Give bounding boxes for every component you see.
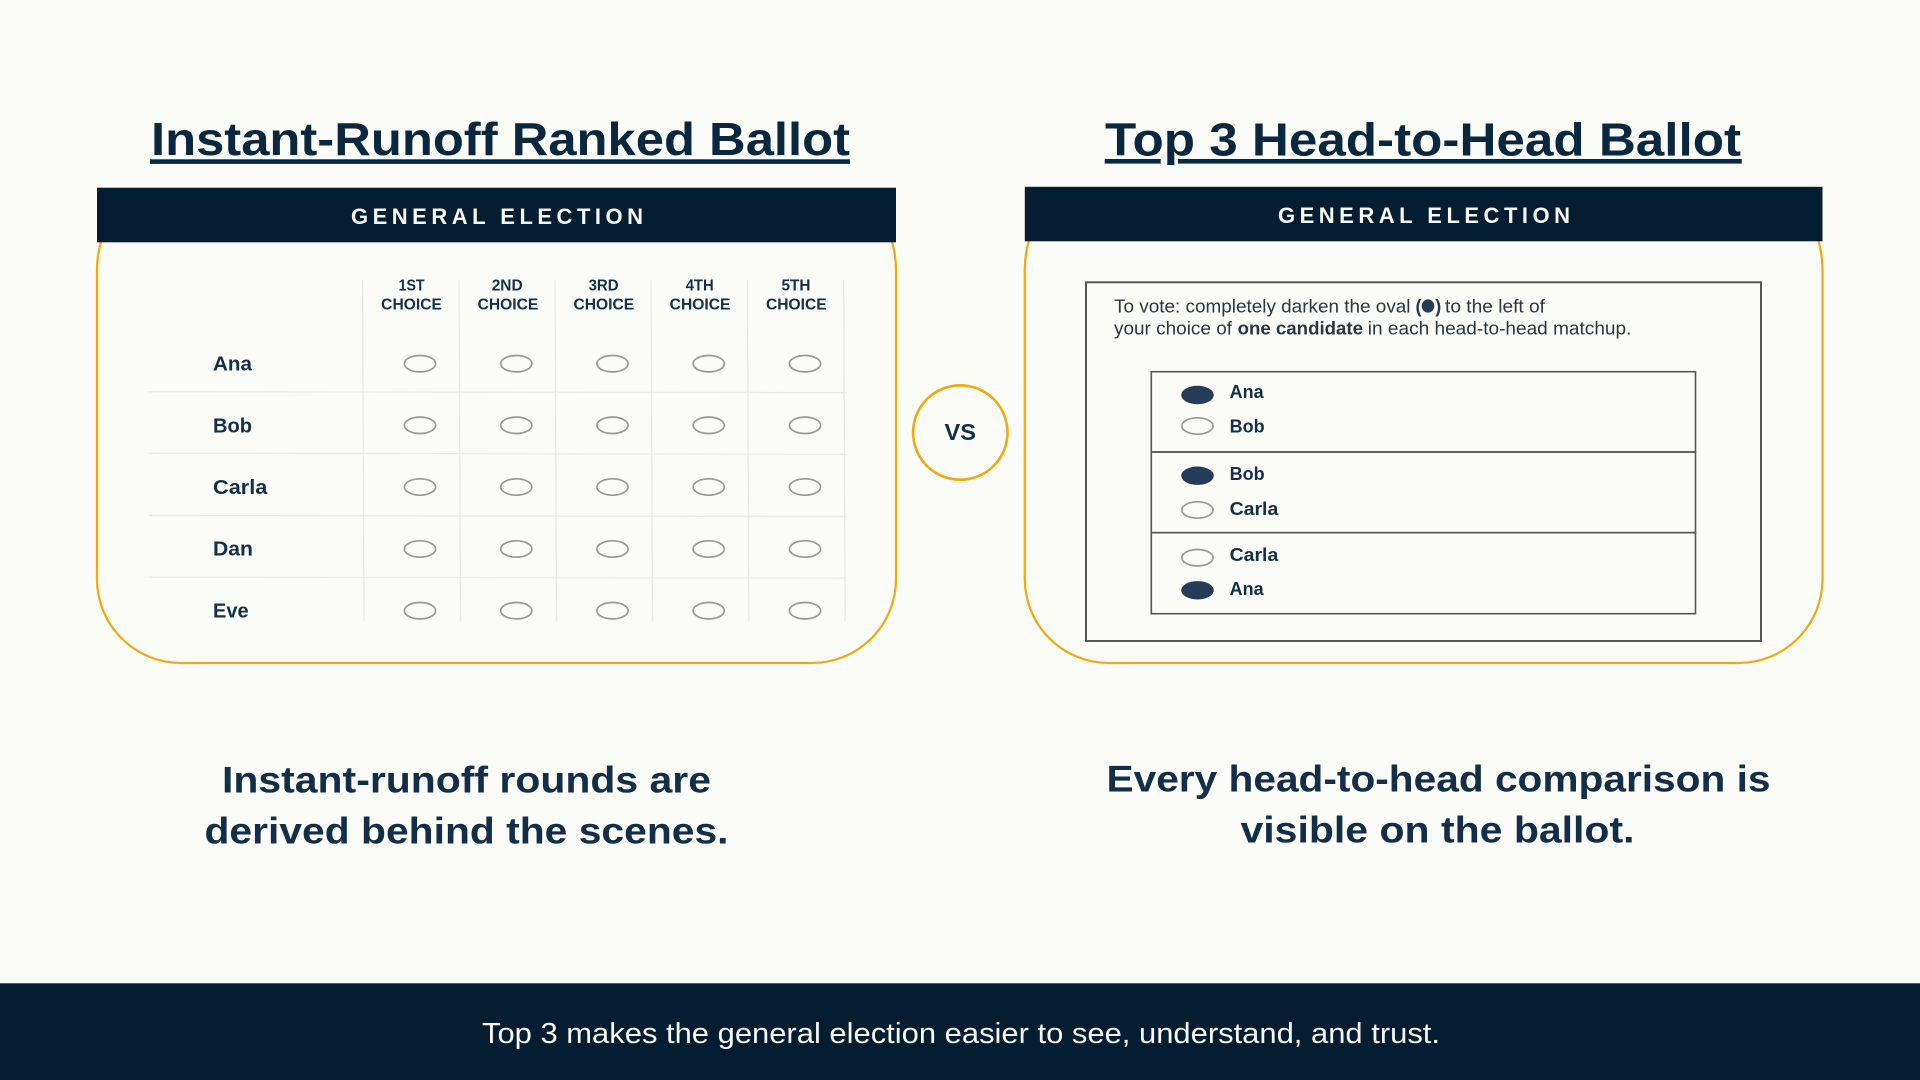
caption: head-to-head: [1106, 759, 1770, 850]
matchup box: Bob vs Carla: [1151, 452, 1696, 533]
heading: Top 3 Head-to-Head Ballot: Top 3 Head-to-Head Ballot: [1105, 114, 1741, 166]
panel outline: [1025, 241, 1822, 663]
panel outline: [97, 242, 896, 663]
caption: head-to-head: Every head-to-head comparison is: [1106, 759, 1770, 800]
row: Bob: [213, 415, 821, 437]
panel: head-to-head ballot: [1025, 187, 1822, 663]
matchup box: Bob vs Carla: Carla: [1230, 499, 1279, 519]
column headers: choices: 2ND: [492, 278, 523, 295]
matchup box: Ana vs Bob: Bob: [1230, 416, 1265, 436]
VS badge: VS: [944, 419, 976, 445]
caption: instant-runoff: derived behind the scenes.: [204, 810, 728, 851]
matchup box: Ana vs Bob: [1151, 372, 1696, 452]
row: Carla: [213, 477, 821, 499]
column headers: choices: CHOICE: [478, 296, 538, 313]
column headers: choices: CHOICE: [574, 296, 634, 313]
row: Eve: [213, 601, 821, 623]
row: Ana: [213, 354, 821, 376]
matchup box: Carla vs Ana: [1151, 533, 1696, 614]
panel: instant-runoff ballot: [97, 188, 896, 663]
column headers: choices: 3RD: [589, 278, 619, 295]
header bar: general election: GENERAL ELECTION: [1278, 203, 1570, 228]
column headers: choices: CHOICE: [670, 296, 730, 313]
voting instructions: your choice of: [1114, 318, 1233, 338]
caption: head-to-head: visible on the ballot.: [1240, 809, 1634, 850]
row: Ana: Ana: [213, 354, 253, 376]
row: Carla: Carla: [213, 477, 268, 499]
voting instructions: To vote: completely darken the oval: [1114, 296, 1410, 316]
voting instructions: to the left of: [1445, 296, 1546, 316]
header bar: general election: [97, 188, 896, 242]
row: Eve: Eve: [213, 601, 249, 623]
column headers: choices: CHOICE: [766, 296, 827, 313]
voting instructions: one candidate: [1238, 318, 1363, 338]
column headers: choices: [381, 278, 827, 313]
ballot outer box: [1086, 282, 1761, 641]
row: Dan: [213, 539, 821, 561]
voting instructions: [1114, 296, 1631, 338]
voting instructions: ): [1435, 296, 1441, 316]
row: Bob: Bob: [213, 415, 252, 437]
column headers: choices: 1ST: [399, 278, 425, 295]
matchup box: Carla vs Ana: Carla: [1230, 545, 1279, 565]
matchup box: Carla vs Ana: Ana: [1230, 579, 1265, 599]
heading: Instant-Runoff Ranked Ballot: Instant-Runoff Ranked Ballot: [151, 113, 850, 165]
footer banner: [0, 983, 1920, 1080]
column headers: choices: 5TH: [782, 278, 810, 295]
column headers: choices: CHOICE: [381, 296, 442, 313]
footer banner: Top 3 makes the general election easier to see, understand, and trust.: [482, 1018, 1440, 1050]
header bar: general election: [1025, 187, 1822, 241]
matchup box: Bob vs Carla: Bob: [1230, 464, 1265, 484]
voting instructions: (: [1416, 296, 1422, 316]
column headers: choices: 4TH: [686, 278, 714, 295]
matchup box: Ana vs Bob: Ana: [1230, 382, 1265, 402]
voting instructions: in each head-to-head matchup.: [1368, 318, 1631, 338]
row: Dan: Dan: [213, 539, 253, 561]
caption: instant-runoff: Instant-runoff rounds are: [222, 760, 711, 801]
header bar: general election: GENERAL ELECTION: [351, 204, 643, 229]
VS badge: [913, 385, 1008, 480]
caption: instant-runoff: [204, 760, 728, 851]
